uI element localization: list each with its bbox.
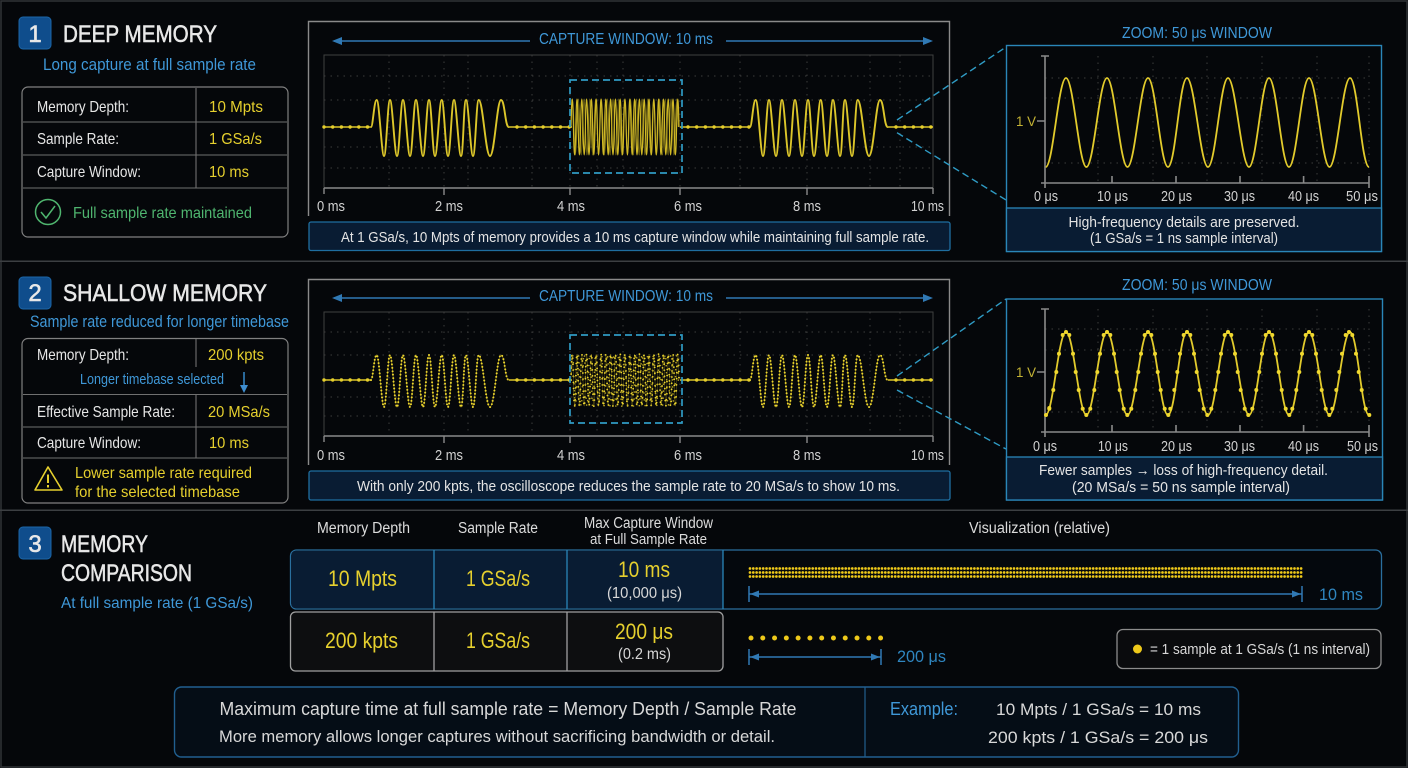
zoom panel: 50 us deep: ZOOM: 50 μs WINDOW	[1122, 25, 1273, 42]
time axis labels 2	[317, 448, 944, 464]
formula box: More memory allows longer captures without sacrificing bandwidth or detail.	[219, 727, 775, 746]
table: shallow memory specs: Lower sample rate required	[75, 465, 252, 482]
zoom panel: 50 us deep: 30 μs	[1224, 189, 1255, 205]
zoom panel: 50 us shallow: 10 μs	[1098, 439, 1128, 455]
time axis labels	[317, 199, 944, 215]
comparison table headers: Sample Rate	[458, 520, 538, 537]
time axis labels: 6 ms	[674, 199, 702, 215]
section 2 header: SHALLOW MEMORY	[63, 280, 267, 307]
zoom caption: High-frequency details are preserved.	[1068, 214, 1300, 231]
time axis labels 2: 10 ms	[911, 448, 944, 464]
capture window arrow: CAPTURE WINDOW: 10 ms	[539, 31, 713, 48]
caption: shallow memory	[309, 471, 950, 500]
sample dots: sparse	[751, 636, 881, 640]
time axis labels 2: 8 ms	[793, 448, 821, 464]
caption: deep memory	[309, 222, 950, 250]
zoom connector lines 2	[897, 299, 1006, 449]
scope panel: shallow memory capture	[308, 280, 950, 465]
table: deep memory specs: 10 Mpts	[209, 99, 263, 116]
caption: shallow memory: With only 200 kpts, the oscilloscope reduces the sample rate to 20 MSa/s to show 10 ms.	[357, 478, 900, 495]
row: 10 Mpts: 1 GSa/s	[466, 566, 530, 591]
zoom panel: 50 us shallow: 30 μs	[1224, 439, 1255, 455]
sine trace	[1046, 78, 1369, 167]
comparison table headers: Max Capture Window	[584, 515, 714, 532]
waveform: full rate bursts	[324, 99, 933, 156]
section 3 header: MEMORY	[61, 531, 148, 558]
table: shallow memory specs: Memory Depth:	[37, 347, 129, 364]
zoom caption 2: (20 MSa/s = 50 ns sample interval)	[1072, 479, 1290, 496]
zoom panel: 50 us deep: 0 μs	[1034, 189, 1058, 205]
table: deep memory specs: 1 GSa/s	[209, 131, 262, 148]
table: shallow memory specs: Longer timebase selected	[80, 371, 224, 388]
table: shallow memory specs: 20 MSa/s	[208, 404, 270, 421]
zoom caption	[1006, 208, 1382, 252]
row: 200 kpts	[290, 612, 723, 671]
section 1 header: 1	[28, 21, 42, 48]
legend	[1117, 630, 1381, 668]
table: deep memory specs: Memory Depth:	[37, 99, 129, 116]
formula box: Maximum capture time at full sample rate = Memory Depth / Sample Rate	[220, 699, 796, 719]
time axis labels: 2 ms	[435, 199, 463, 215]
time axis labels: 8 ms	[793, 199, 821, 215]
scope panel: deep memory capture	[308, 22, 950, 216]
waveform: reduced rate dotted bursts	[324, 354, 933, 407]
zoom panel: 50 us shallow: 40 μs	[1288, 439, 1319, 455]
capture window arrow 2: CAPTURE WINDOW: 10 ms	[539, 288, 713, 305]
zoom panel: 50 us shallow: 20 μs	[1161, 439, 1192, 455]
comparison table headers	[317, 515, 1110, 548]
table: shallow memory specs: for the selected timebase	[75, 484, 240, 501]
row: 200 kpts: (0.2 ms)	[618, 646, 671, 663]
span arrow: 10 ms	[749, 585, 1363, 604]
row: 200 kpts: 200 kpts	[325, 628, 398, 653]
section 1 header	[19, 17, 256, 74]
table: shallow memory specs	[22, 338, 288, 503]
row: 10 Mpts: 10 Mpts	[328, 566, 397, 591]
time axis labels: 0 ms	[317, 199, 345, 215]
table: shallow memory specs: 10 ms	[209, 435, 249, 452]
formula box: 200 kpts / 1 GSa/s = 200 μs	[988, 728, 1208, 747]
table: deep memory specs: 10 ms	[209, 164, 249, 181]
formula box: Example:	[890, 699, 958, 719]
section 3 header: COMPARISON	[61, 560, 192, 587]
zoom panel: 50 us shallow: ZOOM: 50 μs WINDOW	[1122, 277, 1273, 294]
zoom panel: 50 us deep: 50 μs	[1346, 189, 1378, 205]
zoom panel: 50 us shallow: 50 μs	[1347, 439, 1378, 455]
sampled sine trace	[1044, 330, 1371, 417]
comparison table headers: at Full Sample Rate	[590, 532, 707, 548]
section 3 header: 3	[28, 531, 42, 558]
zoom caption: (1 GSa/s = 1 ns sample interval)	[1090, 230, 1278, 247]
zoom panel: 50 us deep: 10 μs	[1097, 189, 1128, 205]
zoom panel: 50 us deep: 40 μs	[1288, 189, 1319, 205]
row: 10 Mpts	[290, 550, 1382, 609]
time axis labels: 4 ms	[557, 199, 585, 215]
table: deep memory specs	[22, 87, 288, 237]
zoom caption 2: Fewer samples → loss of high-frequency detail.	[1039, 462, 1328, 479]
sample dots: dense	[750, 568, 1302, 576]
table: shallow memory specs: Effective Sample Rate:	[37, 404, 175, 421]
row: 200 kpts: 1 GSa/s	[466, 628, 530, 653]
zoom panel: 50 us shallow: 1 V	[1016, 364, 1037, 380]
time axis labels 2: 6 ms	[674, 448, 702, 464]
caption: deep memory: At 1 GSa/s, 10 Mpts of memory provides a 10 ms capture window while maintaining full sample rate.	[341, 229, 929, 246]
zoom connector lines	[897, 47, 1006, 200]
formula box: 10 Mpts / 1 GSa/s = 10 ms	[996, 700, 1201, 719]
row: 200 kpts: 200 μs	[615, 619, 673, 644]
capture window arrow	[332, 31, 933, 48]
span arrow: 200 us	[749, 647, 946, 666]
comparison table headers: Visualization (relative)	[969, 520, 1110, 537]
table: shallow memory specs: 200 kpts	[208, 347, 264, 364]
zoom caption 2	[1006, 457, 1382, 500]
formula box	[174, 687, 1238, 757]
zoom panel: 50 us deep: 20 μs	[1161, 189, 1192, 205]
zoom panel: 50 us shallow: 0 μs	[1033, 439, 1057, 455]
row: 10 Mpts: 10 ms	[618, 557, 670, 582]
dashed highlight box	[570, 80, 682, 173]
row: 10 Mpts: (10,000 μs)	[607, 585, 682, 602]
section 2 header: 2	[28, 280, 42, 307]
dashed highlight box 2	[570, 335, 682, 423]
zoom panel: 50 us shallow	[1006, 277, 1382, 500]
table: shallow memory specs: Capture Window:	[37, 435, 141, 452]
section 2 header: Sample rate reduced for longer timebase	[30, 312, 289, 331]
time axis labels 2: 0 ms	[317, 448, 345, 464]
section 2 header	[19, 277, 289, 331]
time axis labels: 10 ms	[911, 199, 944, 215]
zoom panel: 50 us deep	[1006, 25, 1382, 252]
table: deep memory specs: Capture Window:	[37, 164, 141, 181]
time axis labels 2: 2 ms	[435, 448, 463, 464]
zoom panel: 50 us deep: 1 V	[1016, 113, 1037, 129]
section 3 header: At full sample rate (1 GSa/s)	[61, 595, 253, 612]
time axis labels 2: 4 ms	[557, 448, 585, 464]
section 3 header	[19, 527, 253, 612]
legend: = 1 sample at 1 GSa/s (1 ns interval)	[1150, 641, 1370, 658]
table: deep memory specs: Sample Rate:	[37, 131, 119, 148]
span arrow: 200 us: 200 μs	[897, 647, 946, 666]
table: deep memory specs: Full sample rate maintained	[73, 205, 252, 222]
comparison table headers: Memory Depth	[317, 520, 410, 537]
capture window arrow 2	[332, 288, 933, 305]
section 1 header: DEEP MEMORY	[63, 21, 217, 48]
span arrow: 10 ms: 10 ms	[1319, 585, 1363, 604]
section 1 header: Long capture at full sample rate	[43, 55, 256, 74]
